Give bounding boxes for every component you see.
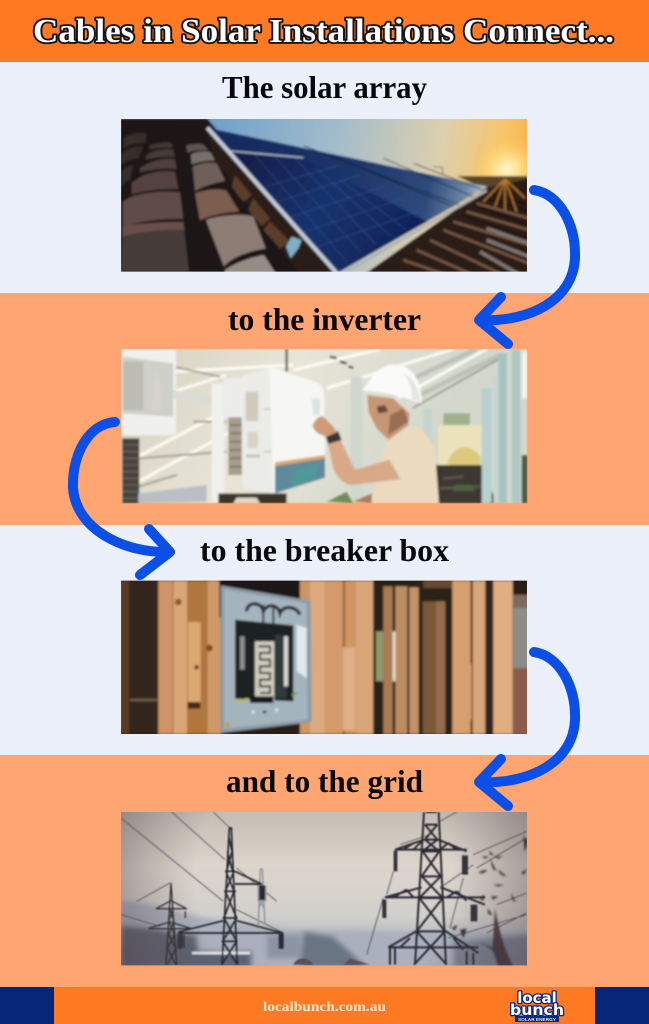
- heading: and to the grid: and to the grid: [226, 763, 423, 799]
- arrow: solar array to inverter: [479, 190, 575, 344]
- heading: the solar array: The solar array: [222, 69, 427, 105]
- arrow: inverter to breaker box: [73, 422, 170, 575]
- photo: solar panels on a tiled roof at sunset: [120, 115, 530, 275]
- photo: electricity pylons in a hazy landscape: [120, 808, 530, 968]
- footer bar: [0, 987, 649, 1024]
- logo: local bunch solar energy: [510, 989, 564, 1022]
- photo: breaker box on timber wall framing: [120, 578, 530, 738]
- title banner: Cables in Solar Installations Connect...: [33, 13, 614, 50]
- logo: local bunch solar energy: bunch: [510, 1001, 564, 1019]
- logo: local bunch solar energy: SOLAR ENERGY: [518, 1017, 556, 1022]
- website address: localbunch.com.au: [263, 1000, 386, 1015]
- title banner: [0, 0, 649, 62]
- logo: local bunch solar energy: local: [517, 989, 557, 1007]
- heading: to the breaker box: to the breaker box: [200, 532, 449, 568]
- arrow: breaker box to grid: [479, 652, 575, 806]
- heading: to the inverter: to the inverter: [228, 301, 421, 337]
- photo: installer in hard hat at an inverter: [121, 349, 528, 503]
